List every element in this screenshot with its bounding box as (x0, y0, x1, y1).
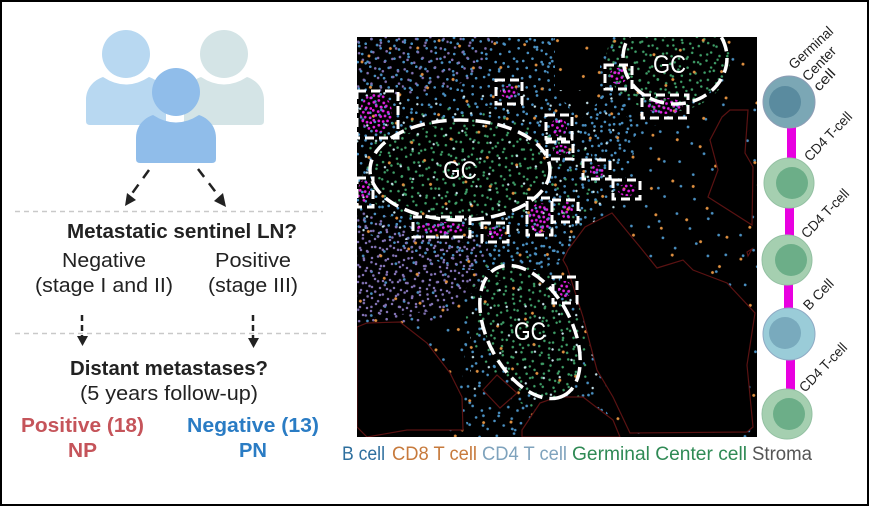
cell: germinal center cell (763, 76, 815, 128)
legend: cell types: Germinal Center cell (572, 444, 747, 465)
legend: cell types: CD8 T cell (392, 444, 477, 465)
stroma regions (357, 110, 755, 437)
panel: cell interaction chain (762, 23, 855, 439)
text: positive stage III: Positive (215, 250, 291, 272)
chain labels: Germinal (785, 23, 836, 72)
magenta connectors (784, 125, 796, 393)
arrow: negative to distant metastases (77, 315, 88, 346)
germinal center labels: GC (514, 318, 546, 346)
germinal center labels: GC (443, 157, 477, 185)
legend: cell types: CD4 T cell (482, 444, 567, 465)
legend: cell types: B cell (342, 444, 385, 465)
chain labels: B Cell (800, 275, 837, 313)
text: follow-up: (5 years follow-up) (80, 383, 258, 405)
heading: metastatic sentinel LN: Metastatic sentinel LN? (67, 221, 297, 243)
chain labels: Center (799, 43, 840, 84)
legend: cell types (342, 444, 812, 465)
chart: spatial cell map (357, 8, 757, 437)
germinal center labels (443, 51, 686, 346)
arrow: patients to positive (198, 169, 226, 207)
label: positive NP group: Positive (18) (21, 415, 144, 437)
label: positive NP group (21, 415, 144, 462)
magenta interaction clusters (358, 68, 683, 297)
text: negative stage I and II: (stage I and II) (35, 275, 173, 297)
germinal center outlines (370, 12, 727, 415)
heading: distant metastases: Distant metastases? (70, 358, 268, 380)
orange and light cells (357, 37, 757, 437)
arrow: positive to distant metastases (248, 315, 259, 348)
dashed boxes around interaction clusters (357, 65, 688, 303)
label: negative PN group: Negative (13) (187, 415, 319, 437)
chain labels: cell (810, 65, 839, 94)
label: negative PN group (187, 415, 319, 462)
chain labels: CD4 T-cell (801, 108, 855, 164)
chain labels: CD4 T-cell (798, 185, 852, 241)
germinal center labels: GC (653, 51, 686, 79)
purple cells (357, 37, 495, 325)
text: negative stage I and II (35, 250, 173, 297)
cell: CD4 T-cell (762, 235, 812, 285)
label: negative PN group: PN (239, 440, 267, 462)
label: positive NP group: NP (68, 440, 97, 462)
chain labels (785, 23, 855, 395)
cell: B cell (763, 308, 815, 360)
legend: cell types: Stroma (752, 444, 812, 465)
sparse blue cells (357, 37, 757, 437)
chain labels: CD4 T-cell (796, 339, 850, 395)
green germinal center cells (362, 37, 730, 407)
text: positive stage III: (stage III) (208, 275, 298, 297)
panel: patient cohort flow (15, 30, 327, 462)
cell: CD4 T-cell (762, 389, 812, 439)
dense blue cells (357, 37, 690, 437)
text: positive stage III (208, 250, 298, 297)
icon: group of three patients (86, 30, 264, 163)
arrow: patients to negative (125, 170, 149, 206)
black germinal center interiors (370, 12, 757, 415)
cell: CD4 T-cell (764, 158, 814, 208)
text: negative stage I and II: Negative (62, 250, 146, 272)
